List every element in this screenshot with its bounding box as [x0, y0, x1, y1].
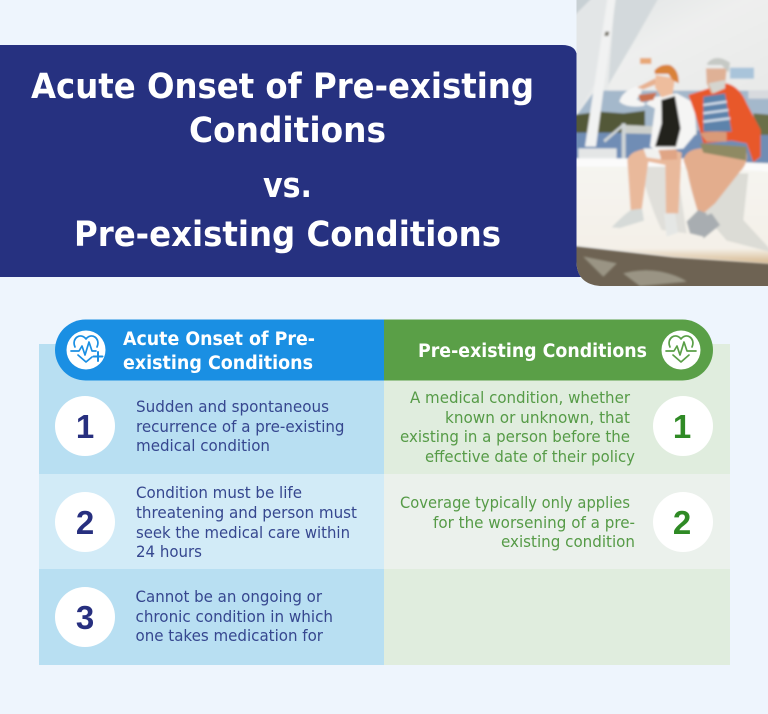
right item 2: 2 — [673, 504, 691, 541]
water — [573, 246, 768, 290]
left item 1: Sudden and spontaneous — [136, 397, 329, 416]
left item 2: threatening and person must — [136, 503, 357, 522]
far shore trees — [573, 111, 645, 133]
banner background — [0, 45, 590, 277]
right item 1 — [400, 388, 713, 466]
left item 3 — [55, 587, 333, 647]
left item 2 — [55, 483, 357, 561]
panel: left column rows — [39, 344, 384, 665]
title text: vs. — [263, 166, 312, 206]
right item 1: 1 — [673, 408, 691, 445]
left heading: Acute Onset of Pre- — [123, 329, 315, 350]
right item 2: Coverage typically only applies — [400, 493, 630, 512]
title banner — [0, 45, 590, 277]
sky and water behind the boat — [577, 90, 768, 132]
left item 2: 2 — [76, 504, 94, 541]
left item 1: medical condition — [136, 436, 270, 455]
right item 1: effective date of their policy — [425, 447, 635, 466]
left item 1 — [55, 396, 344, 456]
right item 1: known or unknown, that — [445, 408, 630, 427]
left heading: existing Conditions — [123, 353, 313, 374]
left item 2: 24 hours — [136, 542, 202, 561]
right item 2: for the worsening of a pre- — [433, 513, 635, 532]
title text: Conditions — [189, 111, 386, 151]
photo: couple sitting on a sailboat — [573, 0, 768, 290]
railing — [625, 125, 697, 135]
left item 3: one takes medication for — [136, 626, 323, 645]
left item 2: Condition must be life — [136, 483, 302, 502]
icon: heart with pulse and plus — [66, 330, 106, 370]
left item 2: seek the medical care within — [136, 523, 350, 542]
right item 2 — [400, 492, 713, 552]
right item 1: A medical condition, whether — [410, 388, 630, 407]
man — [683, 58, 761, 239]
left column header — [55, 320, 384, 380]
title text: Acute Onset of Pre-existing — [31, 67, 534, 107]
left item 3: Cannot be an ongoing or — [136, 587, 322, 606]
left item 3: 3 — [76, 599, 94, 636]
sail — [639, 57, 740, 92]
woman — [612, 65, 696, 237]
right heading: Pre-existing Conditions — [418, 341, 647, 362]
left item 1: recurrence of a pre-existing — [136, 417, 344, 436]
right item 2: existing condition — [501, 532, 635, 551]
right column header — [384, 320, 713, 380]
left item 3: chronic condition in which — [136, 607, 333, 626]
icon: heart with pulse — [662, 330, 700, 370]
left heading — [123, 329, 315, 374]
hull — [573, 158, 768, 263]
left item 1: 1 — [76, 408, 94, 445]
title text — [31, 67, 534, 255]
mast — [585, 0, 616, 147]
panel: right column rows — [384, 344, 730, 665]
right item 1: existing in a person before the — [400, 427, 630, 446]
comparison table — [39, 320, 730, 665]
title text: Pre-existing Conditions — [74, 215, 501, 255]
